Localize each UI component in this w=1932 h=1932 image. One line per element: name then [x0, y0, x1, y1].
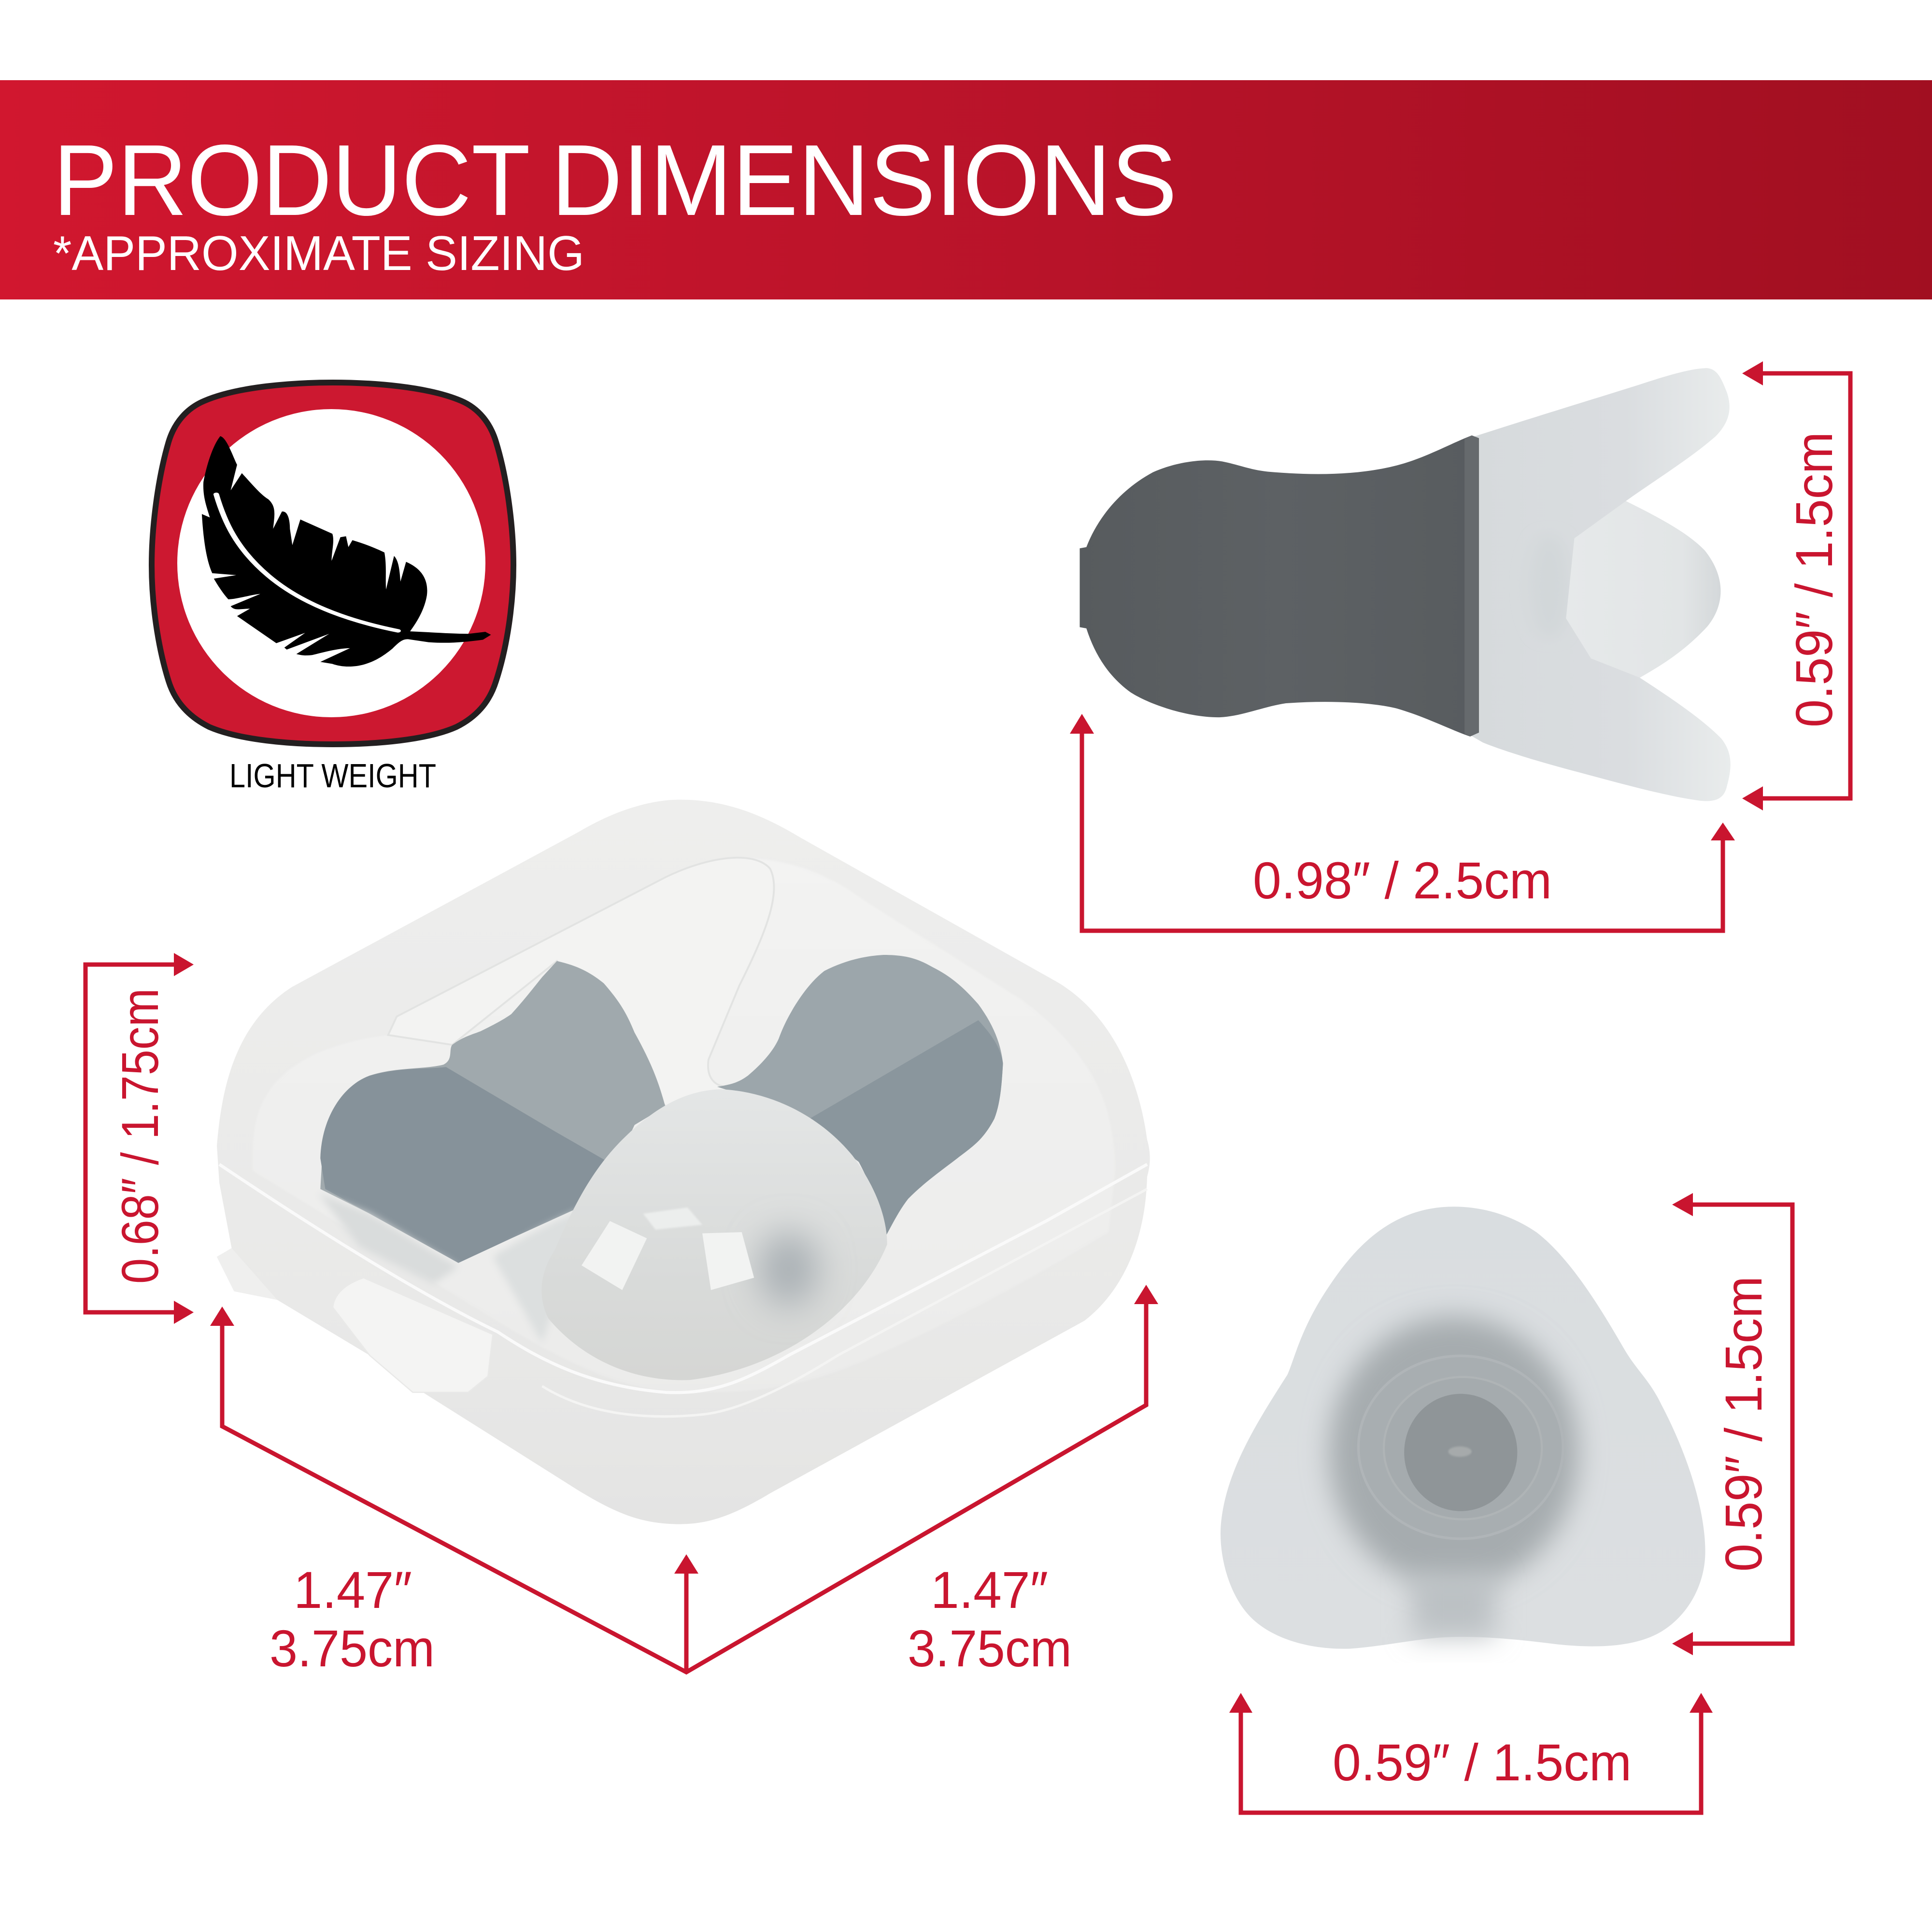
ring [1358, 1356, 1563, 1539]
left plug, upper tone [320, 961, 666, 1263]
feather [202, 436, 491, 667]
scratched highlight [318, 1193, 458, 1284]
triangular silhouette [1221, 1207, 1705, 1649]
collar [1464, 435, 1479, 737]
dimension: end view width [1229, 1693, 1713, 1813]
grey bulb [1080, 435, 1479, 737]
subtitle: *APPROXIMATE SIZING [53, 227, 584, 281]
dome of plug [541, 1089, 887, 1380]
right plug [717, 955, 1003, 1236]
case body [217, 800, 1150, 1524]
left label: 1.47″ [294, 1561, 412, 1619]
label: 0.98″ / 2.5cm [1253, 851, 1552, 909]
left plug, dark tone [320, 1067, 612, 1263]
dimension: case width and depth [210, 1285, 1158, 1677]
right label: 3.75cm [908, 1619, 1072, 1677]
product: clear storage case with earplugs [217, 800, 1150, 1524]
label: 0.59″ / 1.5cm [1785, 432, 1843, 727]
inner lobe [1566, 501, 1720, 678]
dimension: earplug height [1742, 361, 1850, 810]
hub shading [1530, 534, 1569, 639]
header banner [0, 80, 1932, 299]
product: earplug end view [1221, 1207, 1705, 1649]
seams [219, 1165, 1147, 1392]
label: 0.59″ / 1.5cm [1333, 1733, 1632, 1791]
label: 0.59″ / 1.5cm [1714, 1276, 1773, 1572]
lid inner well [253, 858, 1115, 1392]
icon: light weight feather badge [152, 383, 513, 744]
title: PRODUCT [53, 124, 530, 237]
right plug dark band [810, 1020, 1003, 1236]
centre highlight [1448, 1447, 1472, 1457]
dome shadow [759, 1232, 818, 1306]
left label: 3.75cm [270, 1619, 435, 1677]
stem shadow [1412, 1573, 1495, 1637]
title: DIMENSIONS [551, 124, 1177, 237]
dimension: earplug length [1070, 714, 1735, 931]
right label [908, 1561, 1072, 1677]
hinge tab [217, 1248, 277, 1300]
top wing of plug [388, 858, 774, 1107]
right label: 1.47″ [931, 1561, 1048, 1619]
dome highlights [582, 1208, 754, 1290]
dimension: case height [85, 953, 194, 1324]
label: 0.68″ / 1.75cm [111, 988, 169, 1284]
translucent wings [1469, 368, 1731, 801]
clasp [333, 1278, 493, 1392]
icon caption: LIGHT WEIGHT [229, 757, 436, 795]
left label [270, 1561, 435, 1677]
lower wing [493, 1201, 604, 1343]
blurred grey core [1329, 1317, 1578, 1588]
dimension: end view height [1672, 1193, 1792, 1655]
product: earplug side view [1080, 368, 1731, 801]
centre disc [1404, 1394, 1517, 1511]
title [53, 124, 1177, 237]
